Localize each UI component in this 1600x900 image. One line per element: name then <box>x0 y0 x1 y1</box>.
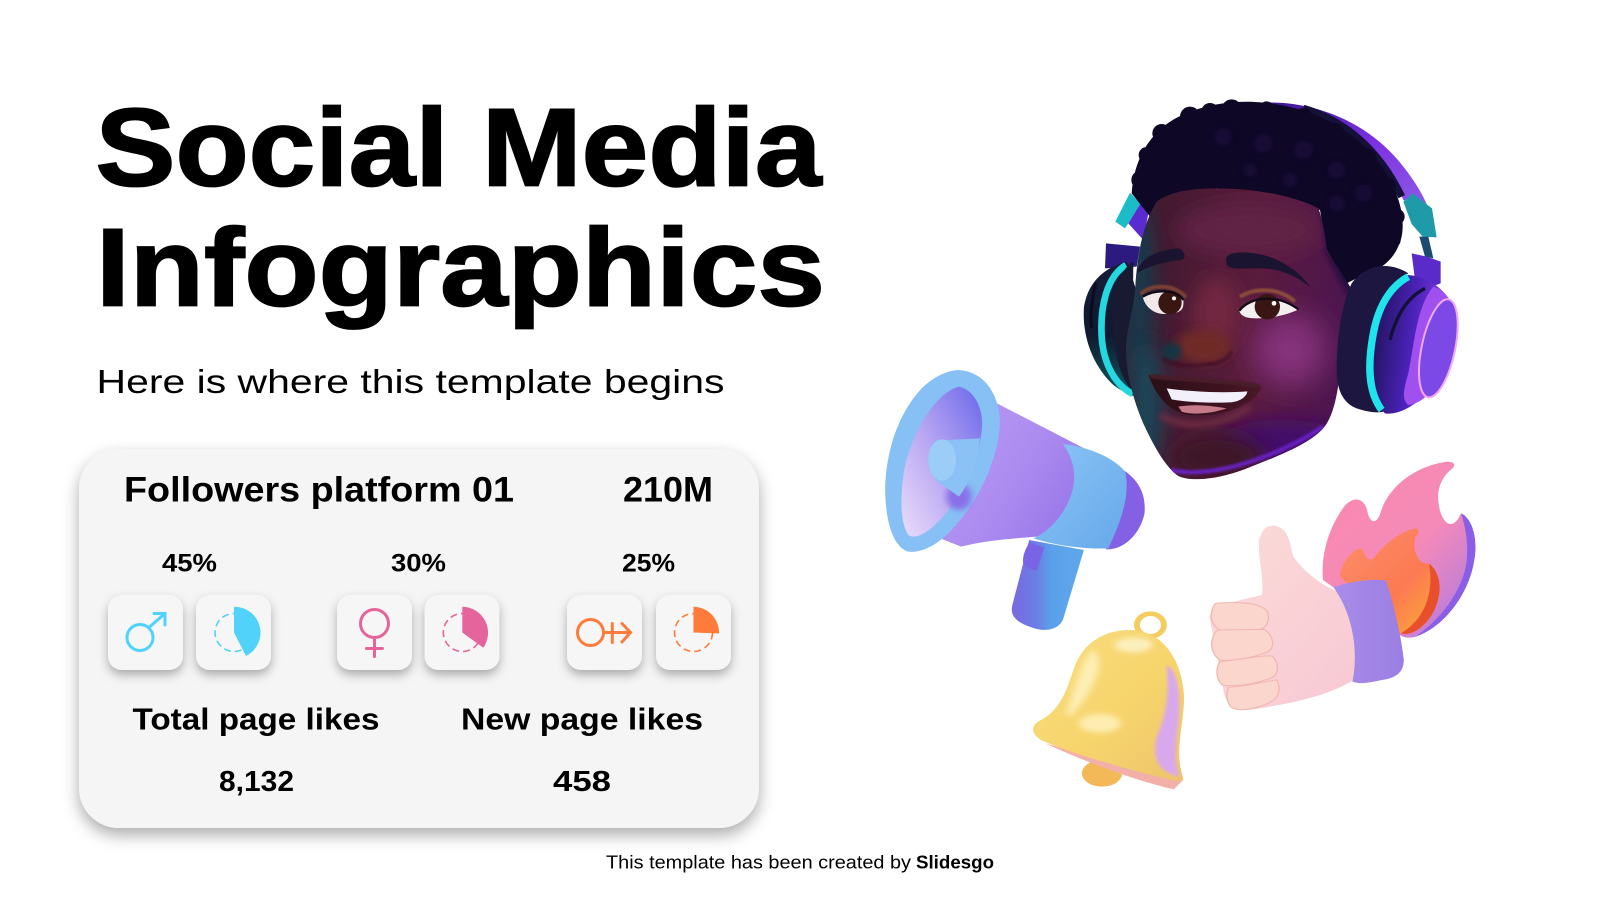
icon: megaphone <box>885 370 1145 630</box>
cuff <box>1334 580 1404 683</box>
icon: female tile <box>337 595 412 670</box>
hair <box>1131 99 1405 283</box>
megaphone throat <box>901 387 982 537</box>
bell ring <box>1137 614 1164 636</box>
icon: flame <box>1323 462 1475 638</box>
megaphone collar <box>1033 444 1127 548</box>
icon: 30% pie tile <box>424 595 500 670</box>
eyebrows <box>1137 248 1310 287</box>
megaphone handle <box>1012 540 1084 630</box>
title <box>96 86 825 330</box>
footer credit: Slidesgo <box>916 852 994 872</box>
value: 210M: 210M <box>623 470 713 510</box>
card background <box>79 449 759 828</box>
bell body <box>1033 630 1184 781</box>
label: new page likes: New page likes <box>461 702 703 736</box>
illustration: 3D icons <box>885 370 1475 789</box>
megaphone driver <box>928 438 980 510</box>
right headband connector <box>1403 193 1437 237</box>
icon: 25% pie tile <box>656 595 731 670</box>
label: total page likes: Total page likes <box>132 702 380 736</box>
icon: character head with headphones <box>1084 99 1465 487</box>
bell clapper <box>1082 760 1122 787</box>
group: female share <box>337 550 500 670</box>
nose <box>1162 330 1232 366</box>
value: 458: 458 <box>553 766 611 798</box>
icon: 45% pie tile <box>196 595 271 670</box>
percent 45%: 45% <box>162 550 217 578</box>
title: Social Media <box>96 86 822 210</box>
megaphone cone <box>936 400 1087 547</box>
icon: bell <box>1033 614 1184 789</box>
title: Infographics <box>96 206 825 330</box>
icon: thumbs up hand <box>1209 526 1404 710</box>
percent 30%: 30% <box>391 550 446 578</box>
footer credit: This template has been created by <box>606 852 911 872</box>
subtitle: Here is where this template begins <box>96 363 724 400</box>
megaphone back cap <box>1096 471 1145 549</box>
panel: followers card <box>79 449 759 828</box>
percent 25%: 25% <box>622 550 675 578</box>
right ear cup <box>1337 253 1465 414</box>
heading: followers platform: Followers platform 01 <box>124 470 514 510</box>
group: other share <box>567 550 731 670</box>
icon: male tile <box>108 595 183 670</box>
hand palm and thumb <box>1209 526 1359 710</box>
megaphone rim <box>885 370 1000 552</box>
icon: non-binary tile <box>567 595 642 670</box>
eyes <box>1141 287 1298 319</box>
bell highlights <box>1115 638 1153 652</box>
left ear cup <box>1084 193 1148 396</box>
headband <box>1263 103 1437 258</box>
fingers <box>1211 603 1279 710</box>
value: 8,132: 8,132 <box>219 766 294 798</box>
group: male share <box>108 550 271 670</box>
bell iridescent stripe <box>1155 665 1180 777</box>
face <box>1126 188 1350 480</box>
bell inner lip <box>1045 743 1183 789</box>
mouth <box>1148 375 1262 424</box>
